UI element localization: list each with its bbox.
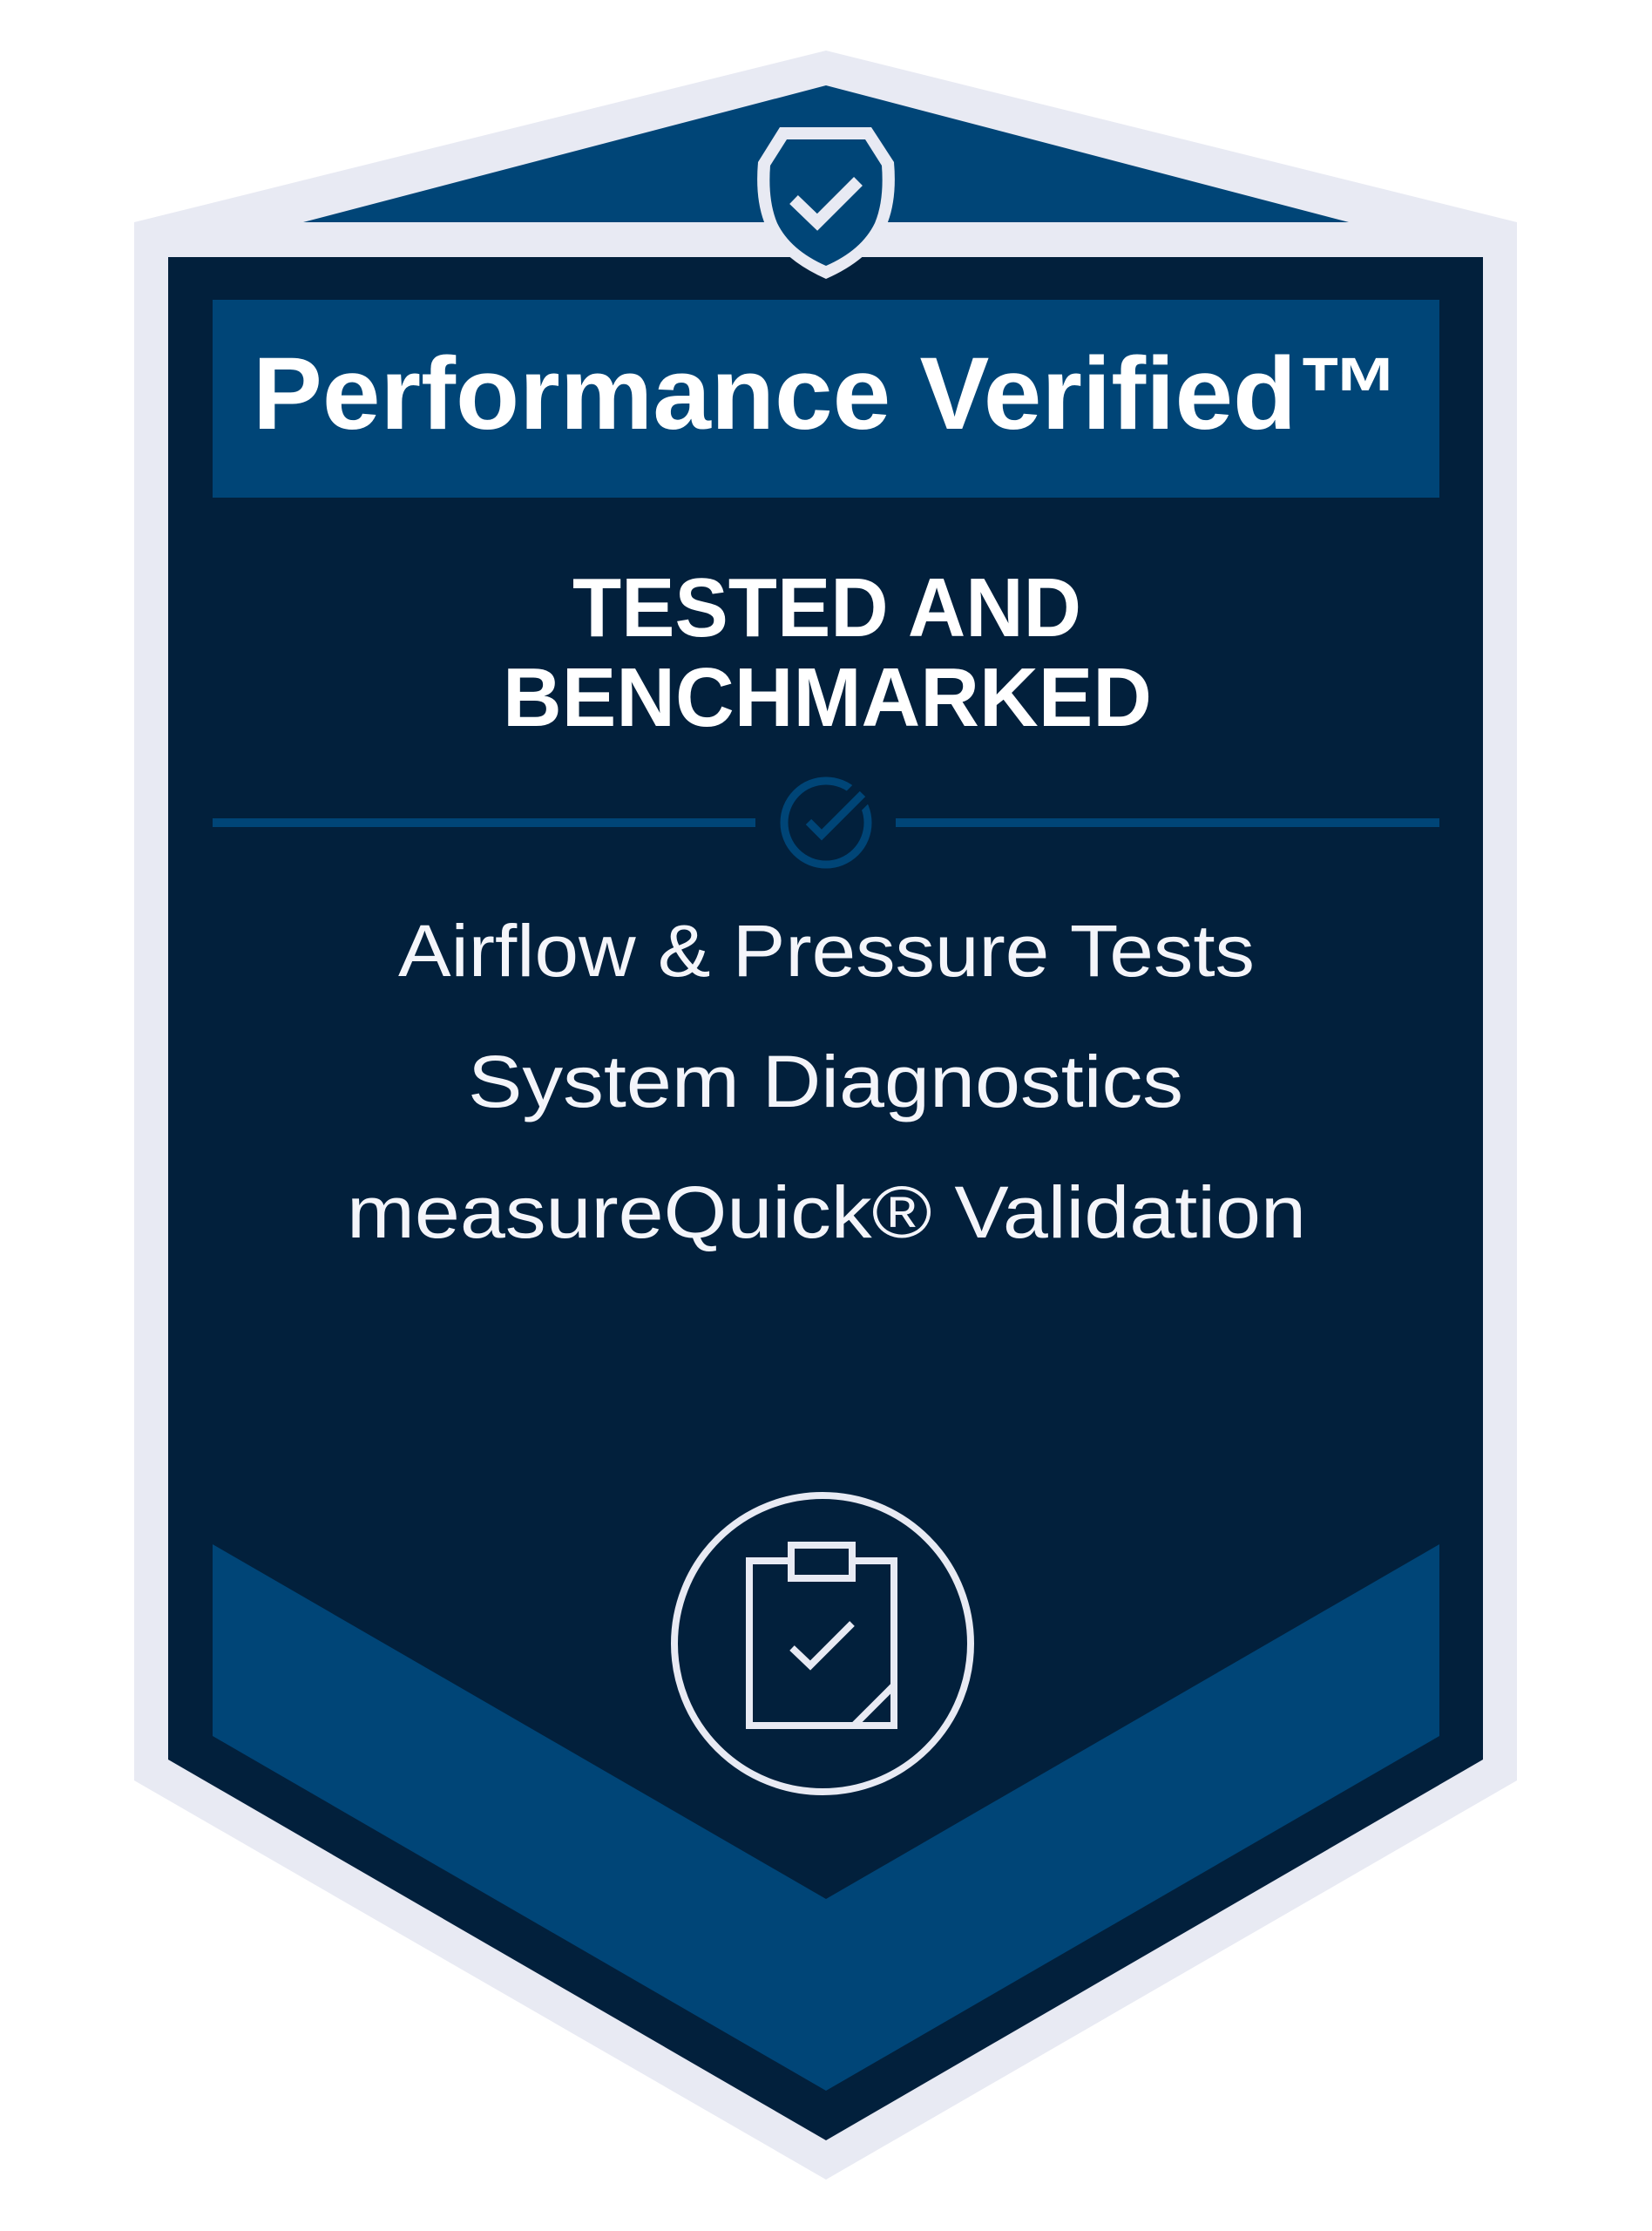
title text: Performance Verified™ [253,336,1401,451]
divider with check icon [213,776,1439,865]
icon: clipboard in circle [674,1495,971,1792]
badge dark body [168,257,1483,1760]
heading: tested and benchmarked [503,561,1152,744]
badge outer border [134,51,1517,2180]
list of tests: Airflow & Pressure Tests [398,910,1255,992]
top roof triangle [303,85,1349,222]
badge bottom point [168,1760,1483,2140]
title banner [213,300,1439,498]
icon: shield with check [757,127,895,279]
list of tests: System Diagnostics [468,1041,1183,1122]
list of tests: measureQuick® Validation [347,1171,1306,1253]
bottom chevron band [213,1544,1439,2091]
heading: tested and benchmarked: BENCHMARKED [503,651,1152,744]
heading: tested and benchmarked: TESTED AND [572,561,1081,654]
list of tests [347,910,1306,1253]
